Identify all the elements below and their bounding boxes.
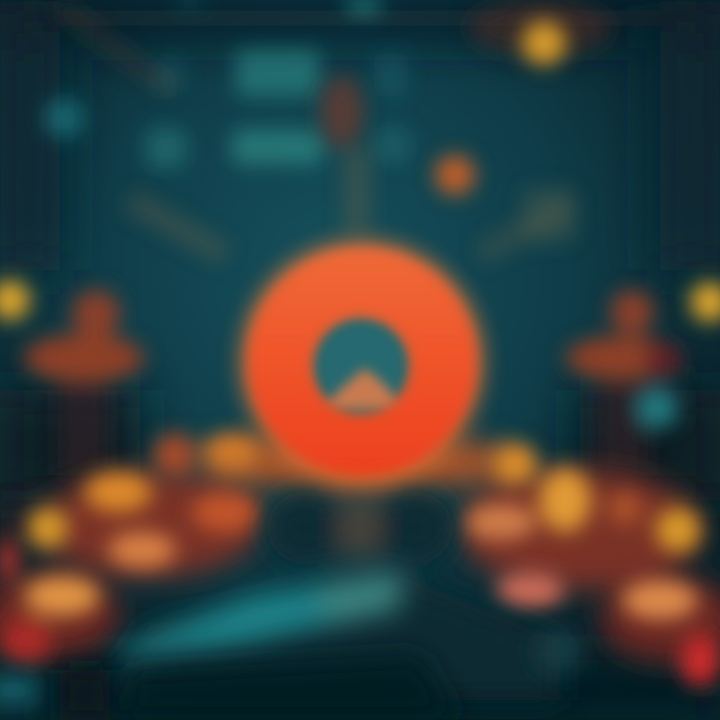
bottom dark pillars [60, 655, 460, 720]
ring outer glow [238, 238, 486, 486]
orange ring [238, 238, 486, 486]
crowd of orange shapes [0, 434, 720, 662]
ring hole [311, 316, 411, 416]
mound in ring hole [320, 368, 405, 410]
side figure: left [24, 290, 144, 475]
crowd highlights [0, 433, 720, 686]
small glowing lights [0, 21, 720, 322]
teal window lights [44, 0, 410, 168]
brown ceiling structures [60, 0, 612, 255]
lower dark stage [100, 492, 560, 700]
side figure: right [566, 290, 682, 475]
ring body [248, 248, 476, 476]
teal floor lights [0, 572, 580, 702]
